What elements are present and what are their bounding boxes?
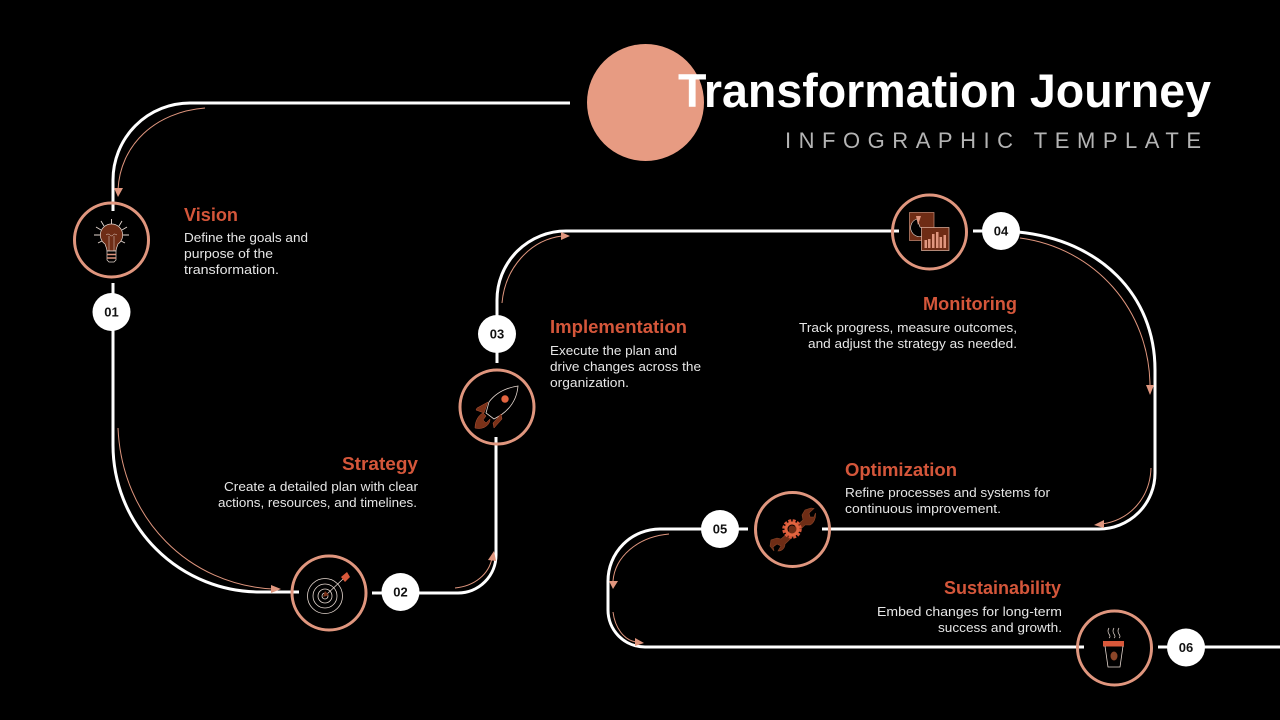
heading: monitoring: Monitoring: [923, 294, 1017, 314]
icon: wrench and gear: [770, 508, 816, 551]
icon: charts: [910, 212, 949, 250]
flow arrow 3: [455, 551, 496, 588]
badge 04: 04: [994, 224, 1009, 238]
heading: implementation: Implementation: [550, 317, 687, 337]
text: vision: transformation.: [184, 262, 279, 277]
badge 05: 05: [713, 522, 727, 536]
text: optimization: continuous improvement.: [845, 501, 1001, 516]
badge 06: [1167, 628, 1205, 666]
step 3: implementation: [460, 315, 701, 444]
badge 04: [982, 212, 1020, 250]
step 2: strategy: [218, 454, 420, 630]
text: monitoring: [799, 320, 1017, 351]
flow arrow 7: [609, 534, 669, 589]
heading: optimization: Optimization: [845, 460, 957, 480]
badge 02: [382, 573, 420, 611]
badge 06: 06: [1179, 640, 1193, 655]
text: vision: [184, 230, 308, 277]
flow arrow 1: [114, 108, 205, 197]
text: implementation: Execute the plan and: [550, 343, 677, 358]
text: sustainability: Embed changes for long-term: [877, 604, 1062, 619]
flow arrow 8: [613, 612, 644, 646]
icon: light bulb: [94, 219, 129, 262]
text: monitoring: Track progress, measure outcomes,: [799, 320, 1017, 335]
text: strategy: actions, resources, and timelines.: [218, 495, 417, 510]
badge 02: 02: [393, 584, 408, 600]
flow arrow 2: [118, 428, 281, 593]
text: optimization: Refine processes and systems for: [845, 485, 1051, 500]
subtitle: INFOGRAPHIC TEMPLATE: [785, 128, 1201, 153]
text: strategy: Create a detailed plan with clear: [224, 479, 419, 494]
icon ring: implementation: [460, 370, 534, 444]
badge 03: 03: [490, 326, 504, 342]
text: implementation: [550, 343, 701, 390]
badge 01: [92, 293, 130, 331]
step 5: optimization: [701, 460, 1051, 566]
text: vision: purpose of the: [184, 246, 273, 261]
icon ring: optimization: [756, 492, 830, 566]
journey path: [113, 103, 1280, 647]
text: monitoring: and adjust the strategy as needed.: [808, 336, 1017, 351]
text: optimization: [845, 485, 1051, 516]
text: vision: Define the goals and: [184, 230, 308, 245]
badge 05: [701, 510, 739, 548]
title: Transformation Journey: [678, 64, 1211, 117]
icon: rocket: [475, 386, 518, 429]
text: implementation: organization.: [550, 375, 629, 390]
badge 03: [478, 315, 516, 353]
icon ring: monitoring: [892, 195, 966, 269]
text: sustainability: success and growth.: [938, 620, 1062, 635]
header circle: [587, 44, 704, 161]
flow arrow 6: [1094, 468, 1151, 528]
icon ring: vision: [74, 203, 148, 277]
flow arrow 4: [502, 232, 570, 303]
icon: target with dart: [308, 572, 350, 614]
heading: strategy: Strategy: [342, 454, 418, 474]
step 6: sustainability: [877, 578, 1205, 685]
icon ring: sustainability: [1078, 611, 1152, 685]
badge 01: 01: [104, 304, 119, 320]
text: strategy: [218, 479, 419, 510]
text: sustainability: [877, 604, 1062, 635]
step 1: vision: [74, 203, 308, 331]
icon: coffee cup: [1103, 628, 1124, 667]
step 4: monitoring: [799, 195, 1020, 351]
icon ring: strategy: [292, 556, 366, 630]
flow arrow 5: [1020, 238, 1154, 395]
text: implementation: drive changes across the: [550, 359, 701, 374]
heading: sustainability: Sustainability: [944, 578, 1061, 598]
heading: vision: Vision: [184, 205, 238, 225]
